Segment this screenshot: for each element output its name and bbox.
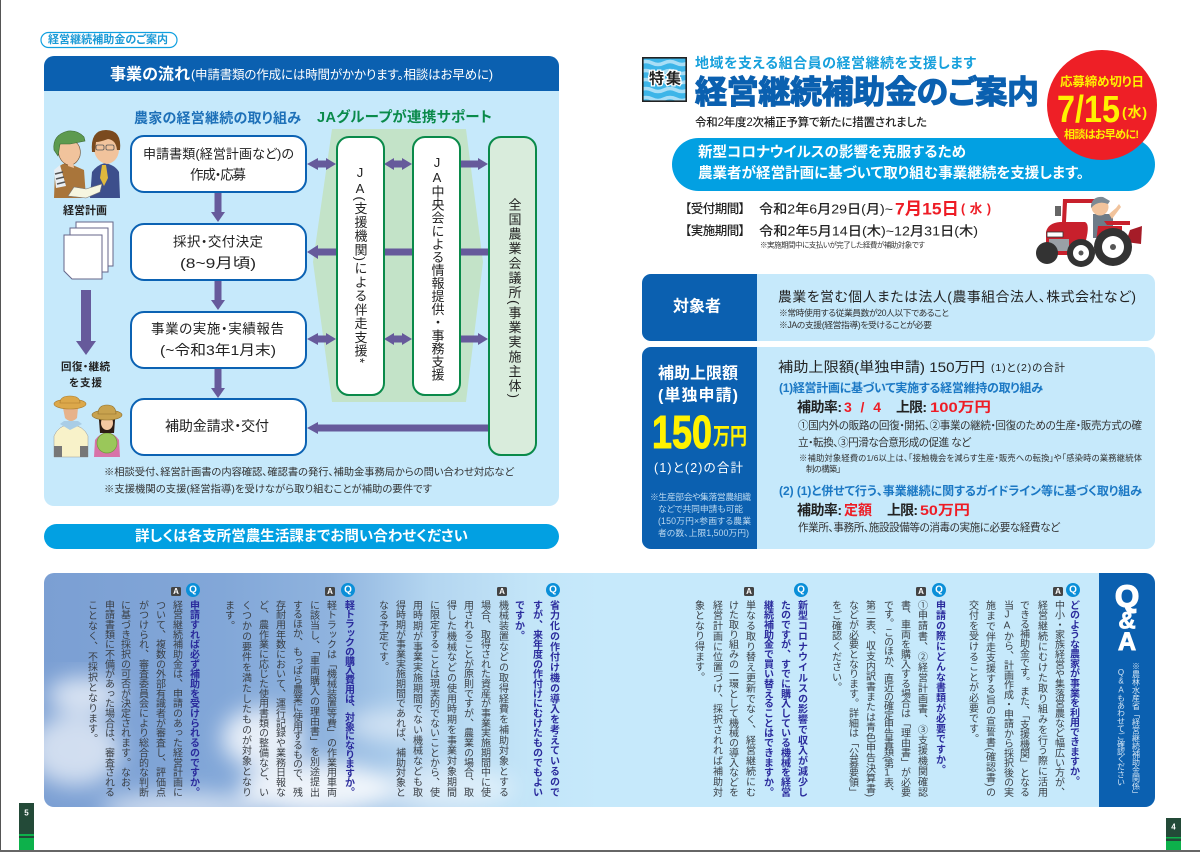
question 4: に限定することは現実的でないことから、使 bbox=[428, 600, 440, 798]
periods: ※実施期間中に支払いが完了した経費が補助対象です bbox=[760, 240, 925, 250]
question 6: ついて、複数の外部有識者が審査し、評価点 bbox=[154, 600, 166, 798]
panel: eligibility: ※常時使用する従業員数が20人以下であること bbox=[779, 307, 949, 318]
arrow: recovery support bbox=[76, 290, 96, 355]
section tag: 経営継続補助金のご案内 bbox=[48, 32, 168, 46]
deadline badge bbox=[1047, 50, 1157, 160]
question 3: たのですが、すでに購入している機械を経営 bbox=[778, 600, 790, 798]
subsidy limit summary: ※生産部会や集落営農組織 bbox=[650, 491, 751, 502]
step 3: 事業の実施・実績報告 bbox=[151, 322, 284, 336]
periods bbox=[685, 200, 991, 250]
notes: ※支援機関の支援(経営指導)を受けながら取り組むことが補助の要件です bbox=[104, 482, 432, 496]
question 3: けた取り組みの一環として機械の導入などを bbox=[726, 600, 738, 797]
step 1: 作成・応募 bbox=[190, 168, 246, 182]
question 3: 新型コロナウイルスの影響で収入が減少し bbox=[796, 599, 808, 797]
question 2: をご確認ください。 bbox=[830, 600, 842, 693]
periods: 7月15日 bbox=[895, 200, 959, 218]
icon: farming couple bbox=[54, 396, 122, 457]
item 1: 上限: bbox=[896, 399, 927, 415]
page number 5 bbox=[19, 803, 34, 850]
subsidy limit summary: 補助上限額 bbox=[658, 364, 738, 382]
panel: business flow bbox=[44, 56, 559, 506]
Q&A side note bbox=[1116, 662, 1140, 798]
deadline badge: 応募締め切り日 bbox=[1060, 74, 1144, 89]
item 1: 補助率: bbox=[797, 399, 842, 415]
panel: Q and A bbox=[29, 573, 1155, 824]
question 1: 当 JA から、計画作成・申請から採択後の実 bbox=[1002, 599, 1014, 798]
item 2: 定額 bbox=[844, 502, 872, 518]
question 4: 用時期が事業実施期間でない機械なども取 bbox=[410, 600, 422, 798]
question 5: 軽トラックは「機械装置等費」の作業用車両 bbox=[324, 600, 336, 798]
question 1: 施まで伴走支援する旨の宣誓書(確認書)の bbox=[984, 599, 996, 797]
heading: JA group: JAグループが連携サポート bbox=[317, 108, 492, 126]
deadline badge: (水) bbox=[1122, 104, 1147, 120]
panel: subsidy limit bbox=[642, 347, 1155, 549]
question 4: なる予定です。 bbox=[376, 600, 388, 672]
question 1: 経営継続にむけた取り組みを行う際に活用 bbox=[1036, 599, 1048, 798]
label: business plan: 経営計画 bbox=[63, 203, 107, 217]
step 1: 申請書類(経営計画など)の bbox=[143, 146, 294, 162]
question 3: 単なる取り替え更新でなく、経営継続にむ bbox=[744, 599, 756, 797]
question 3: 象となり得ます。 bbox=[692, 599, 704, 682]
item 1: 3/4 bbox=[844, 399, 881, 415]
question 3: A bbox=[746, 587, 752, 596]
page number 4: 4 bbox=[1171, 822, 1176, 832]
icon: tractor bbox=[1036, 197, 1142, 267]
question 3: 継続補助金で買い替えることはできますか。 bbox=[762, 599, 774, 797]
periods: 【実施期間】 bbox=[685, 223, 745, 238]
question 2: 書、車両を購入する場合は「理由書」が必要 bbox=[898, 599, 910, 798]
item 2: 50万円 bbox=[920, 502, 970, 518]
question 6: Q bbox=[189, 584, 197, 596]
item 1 bbox=[779, 380, 1143, 474]
contact bar: 詳しくは各支所営農生活課までお問い合わせください bbox=[135, 527, 468, 545]
question 4: 機械装置などの取得経費を補助対象とする bbox=[496, 599, 508, 797]
question 6 bbox=[86, 583, 200, 798]
question 2: Q bbox=[935, 584, 943, 596]
subsidy limit summary: 150 bbox=[652, 406, 712, 458]
question 2: 第二表、収支内訳書または青色申告決算書) bbox=[864, 599, 876, 797]
heading: farmers: 農家の経営継続の取り組み bbox=[134, 110, 301, 126]
JA support box bbox=[337, 137, 384, 395]
subsidy limit summary: 万円 bbox=[713, 423, 747, 449]
panel header bbox=[44, 56, 559, 91]
notes: ※相談受付、経営計画書の内容確認、確認書の発行、補助金事務局からの問い合わせ対応など bbox=[104, 466, 514, 478]
Q&A side note: ※農林水産省「経営継続補助金関係」 bbox=[1132, 662, 1140, 798]
question 1: Q bbox=[1069, 584, 1077, 596]
question 2: などが必要となります。詳細は「公募要領」 bbox=[846, 600, 858, 797]
question 2: 申請の際にどんな書類が必要ですか。 bbox=[934, 599, 946, 775]
subsidy limit summary: (1)と(2)の合計 bbox=[654, 460, 743, 475]
question 5 bbox=[222, 583, 355, 798]
headline kicker: 地域を支える組合員の経営継続を支援します bbox=[695, 55, 977, 71]
question 1: 中小・家族経営や集落営農など幅広い方が、 bbox=[1052, 599, 1064, 797]
question 4: 得した機械などの使用時期を事業対象期間 bbox=[444, 600, 456, 798]
question 6: ことなく、不採択となります。 bbox=[86, 600, 98, 744]
item 1: ①国内外の販路の回復・開拓、②事業の継続・回復のための生産・販売方式の確 bbox=[798, 419, 1142, 432]
step 4 bbox=[131, 399, 306, 455]
subsidy limit summary bbox=[642, 347, 757, 549]
question 3 bbox=[692, 583, 808, 798]
step 4: 補助金請求・交付 bbox=[165, 418, 269, 434]
deadline badge: 7/15 bbox=[1057, 89, 1120, 131]
Q&A heading: Q bbox=[1115, 578, 1139, 614]
item 2: 上限: bbox=[887, 502, 918, 518]
question 1: できる補助金です。また、「支援機関」となる bbox=[1018, 600, 1030, 797]
label: recovery support bbox=[61, 360, 110, 389]
feature badge: 特集 bbox=[649, 70, 681, 88]
step 2: (8~9月頃) bbox=[180, 255, 256, 271]
step 3 bbox=[131, 312, 306, 368]
question 4: 場合、取得された資産が事業実施期間中に使 bbox=[478, 599, 490, 798]
national chamber box bbox=[489, 137, 536, 455]
panel header: 事業の流れ bbox=[110, 64, 190, 84]
subsidy limit summary: (単独申請) bbox=[658, 386, 738, 404]
question 1: どのような農家が事業を利用できますか。 bbox=[1068, 599, 1080, 786]
question 4 bbox=[376, 583, 560, 798]
question 5: に該当し、「車両購入の理由書」を別途提出 bbox=[308, 600, 320, 797]
question 5: 存耐用年数において、運行記録や業務日報な bbox=[274, 599, 286, 797]
Q&A side note: Q&A もあわせてご確認ください bbox=[1116, 668, 1126, 786]
question 3: 経営計画に位置づけ、採択されれば補助対 bbox=[710, 599, 722, 797]
page number 4 bbox=[1166, 818, 1181, 850]
question 4: 用されることが原則ですが、農業の場合、取 bbox=[462, 600, 474, 798]
item 2 bbox=[779, 483, 1142, 534]
question 4: 省力化の作付け機の導入を考えているので bbox=[548, 599, 560, 797]
subsidy details: 補助上限額(単独申請) 150万円 bbox=[778, 359, 985, 375]
question 1: A bbox=[1055, 587, 1061, 596]
JA central box bbox=[413, 137, 460, 395]
step 3: (~令和3年1月末) bbox=[160, 342, 276, 358]
step 2: 採択・交付決定 bbox=[173, 234, 263, 250]
question 5: ど、農作業に応じた使用書類の整備など、い bbox=[256, 600, 268, 797]
item 1: 100万円 bbox=[930, 399, 991, 415]
question 5: するほか、もっぱら農業に使用するもので、残 bbox=[290, 600, 302, 798]
panel: eligibility bbox=[642, 274, 1155, 341]
subsidy details bbox=[778, 359, 1143, 534]
item 1: ※補助対象経費の1/6以上は、「接触機会を減らす生産・販売への転換」や「感染時の業務継続体 bbox=[799, 453, 1143, 463]
purpose banner: 新型コロナウイルスの影響を克服するため bbox=[698, 143, 966, 161]
question 6: に基づき採択の可否が決定されます。なお、 bbox=[118, 600, 130, 797]
periods: 令和2年6月29日(月)~ bbox=[759, 202, 893, 216]
item 2: (2) (1)と併せて行う、事業継続に関するガイドライン等に基づく取り組み bbox=[779, 483, 1142, 498]
purpose banner: 農業者が経営計画に基づいて取り組む事業継続を支援します。 bbox=[698, 164, 1084, 182]
question 6: 経営継続補助金は、申請のあった経営計画に bbox=[170, 599, 182, 797]
periods: 令和2年5月14日(木)~12月31日(木) bbox=[759, 224, 978, 238]
contact bar bbox=[44, 524, 559, 549]
page number 5: 5 bbox=[24, 808, 29, 818]
JA support box: JA (支援機関)による伴走支援* bbox=[352, 165, 368, 363]
Q&A heading: A bbox=[1118, 628, 1136, 656]
question 5: くつかの要件を満たしたものが対象となり bbox=[240, 600, 252, 797]
question 3: Q bbox=[797, 584, 805, 596]
question 1: 交付を受けることが必要です。 bbox=[966, 600, 978, 744]
national chamber box: 全国農業会議所(事業実施主体) bbox=[506, 198, 522, 398]
deadline badge: 相談はお早めに! bbox=[1064, 127, 1139, 141]
panel: eligibility: ※JAの支援(経営指導)を受けることが必要 bbox=[779, 319, 932, 330]
question 5: 軽トラックの購入費用は、対象になりますか。 bbox=[342, 599, 354, 797]
icon: documents bbox=[64, 222, 113, 279]
question 4: すが、来年度の作付けにむけたものでもよい bbox=[530, 600, 542, 797]
item 2: 作業所、事務所、施設設備等の消毒の実施に必要な経費など bbox=[798, 521, 1061, 534]
cloud background bbox=[29, 677, 515, 824]
JA central box: JA 中央会による情報提供・事務支援 bbox=[430, 155, 444, 381]
item 1: (1)経営計画に基づいて実施する経営維持の取り組み bbox=[779, 380, 1043, 395]
icon: consultant and farmer bbox=[54, 130, 120, 198]
Q&A heading: & bbox=[1118, 608, 1136, 634]
question 5: ます。 bbox=[222, 600, 234, 631]
question 1 bbox=[966, 583, 1080, 798]
question 2: A bbox=[918, 587, 924, 596]
purpose banner bbox=[672, 138, 1155, 191]
question 4: ですか。 bbox=[512, 600, 524, 641]
subtitle: 令和2年度2次補正予算で新たに措置されました bbox=[695, 115, 927, 129]
feature badge bbox=[640, 57, 688, 102]
subsidy limit summary: 者の数、上限1,500万円) bbox=[658, 527, 749, 538]
subsidy limit summary: (150万円×参画する農業 bbox=[658, 515, 751, 526]
item 2: 補助率: bbox=[797, 502, 842, 518]
question 4: 得時期が事業実施期間であれば、補助対象と bbox=[394, 600, 406, 797]
subsidy details: (1)と(2)の合計 bbox=[991, 361, 1066, 374]
label: recovery support: 回復・継続 bbox=[61, 360, 110, 373]
question 6: 申請書類に不備があった場合は、審査される bbox=[102, 599, 114, 797]
notes bbox=[104, 466, 514, 496]
question 6: 申請すれば必ず補助を受けられるのですか。 bbox=[188, 599, 200, 797]
question 6: がつけられ、審査委員会により総合的な判断 bbox=[136, 599, 148, 798]
question 6: A bbox=[173, 587, 179, 596]
question 4: Q bbox=[549, 584, 557, 596]
label: recovery support: を支援 bbox=[69, 376, 102, 389]
subsidy limit summary: などで共同申請も可能 bbox=[658, 503, 743, 514]
connection arrows bbox=[211, 158, 488, 434]
periods: (水) bbox=[961, 201, 991, 216]
panel: eligibility: 対象者 bbox=[673, 296, 721, 316]
item 1: 立・転換、③円滑な合意形成の促進 など bbox=[798, 436, 972, 449]
step 2 bbox=[131, 224, 306, 280]
question 5: Q bbox=[344, 584, 352, 596]
panel header: (申請書類の作成には時間がかかります。相談はお早めに) bbox=[191, 67, 493, 82]
question 2: ①申請書、②経営計画書、③支援機関確認 bbox=[916, 600, 928, 798]
question 2 bbox=[830, 583, 946, 798]
support hexagon bbox=[313, 129, 483, 402]
Q&A heading bbox=[1115, 578, 1139, 656]
main title: 経営継続補助金のご案内 bbox=[695, 74, 1039, 110]
panel: eligibility: 農業を営む個人または法人(農事組合法人、株式会社など) bbox=[778, 290, 1136, 304]
question 5: A bbox=[327, 587, 333, 596]
item 1: 制の構築」 bbox=[806, 464, 841, 474]
section tag bbox=[41, 32, 177, 48]
question 4: A bbox=[499, 587, 505, 596]
question 2: です。このほか、直近の確定申告書類(第 1 表、 bbox=[882, 600, 894, 797]
step 1 bbox=[131, 136, 306, 192]
periods: 【受付期間】 bbox=[685, 201, 745, 216]
